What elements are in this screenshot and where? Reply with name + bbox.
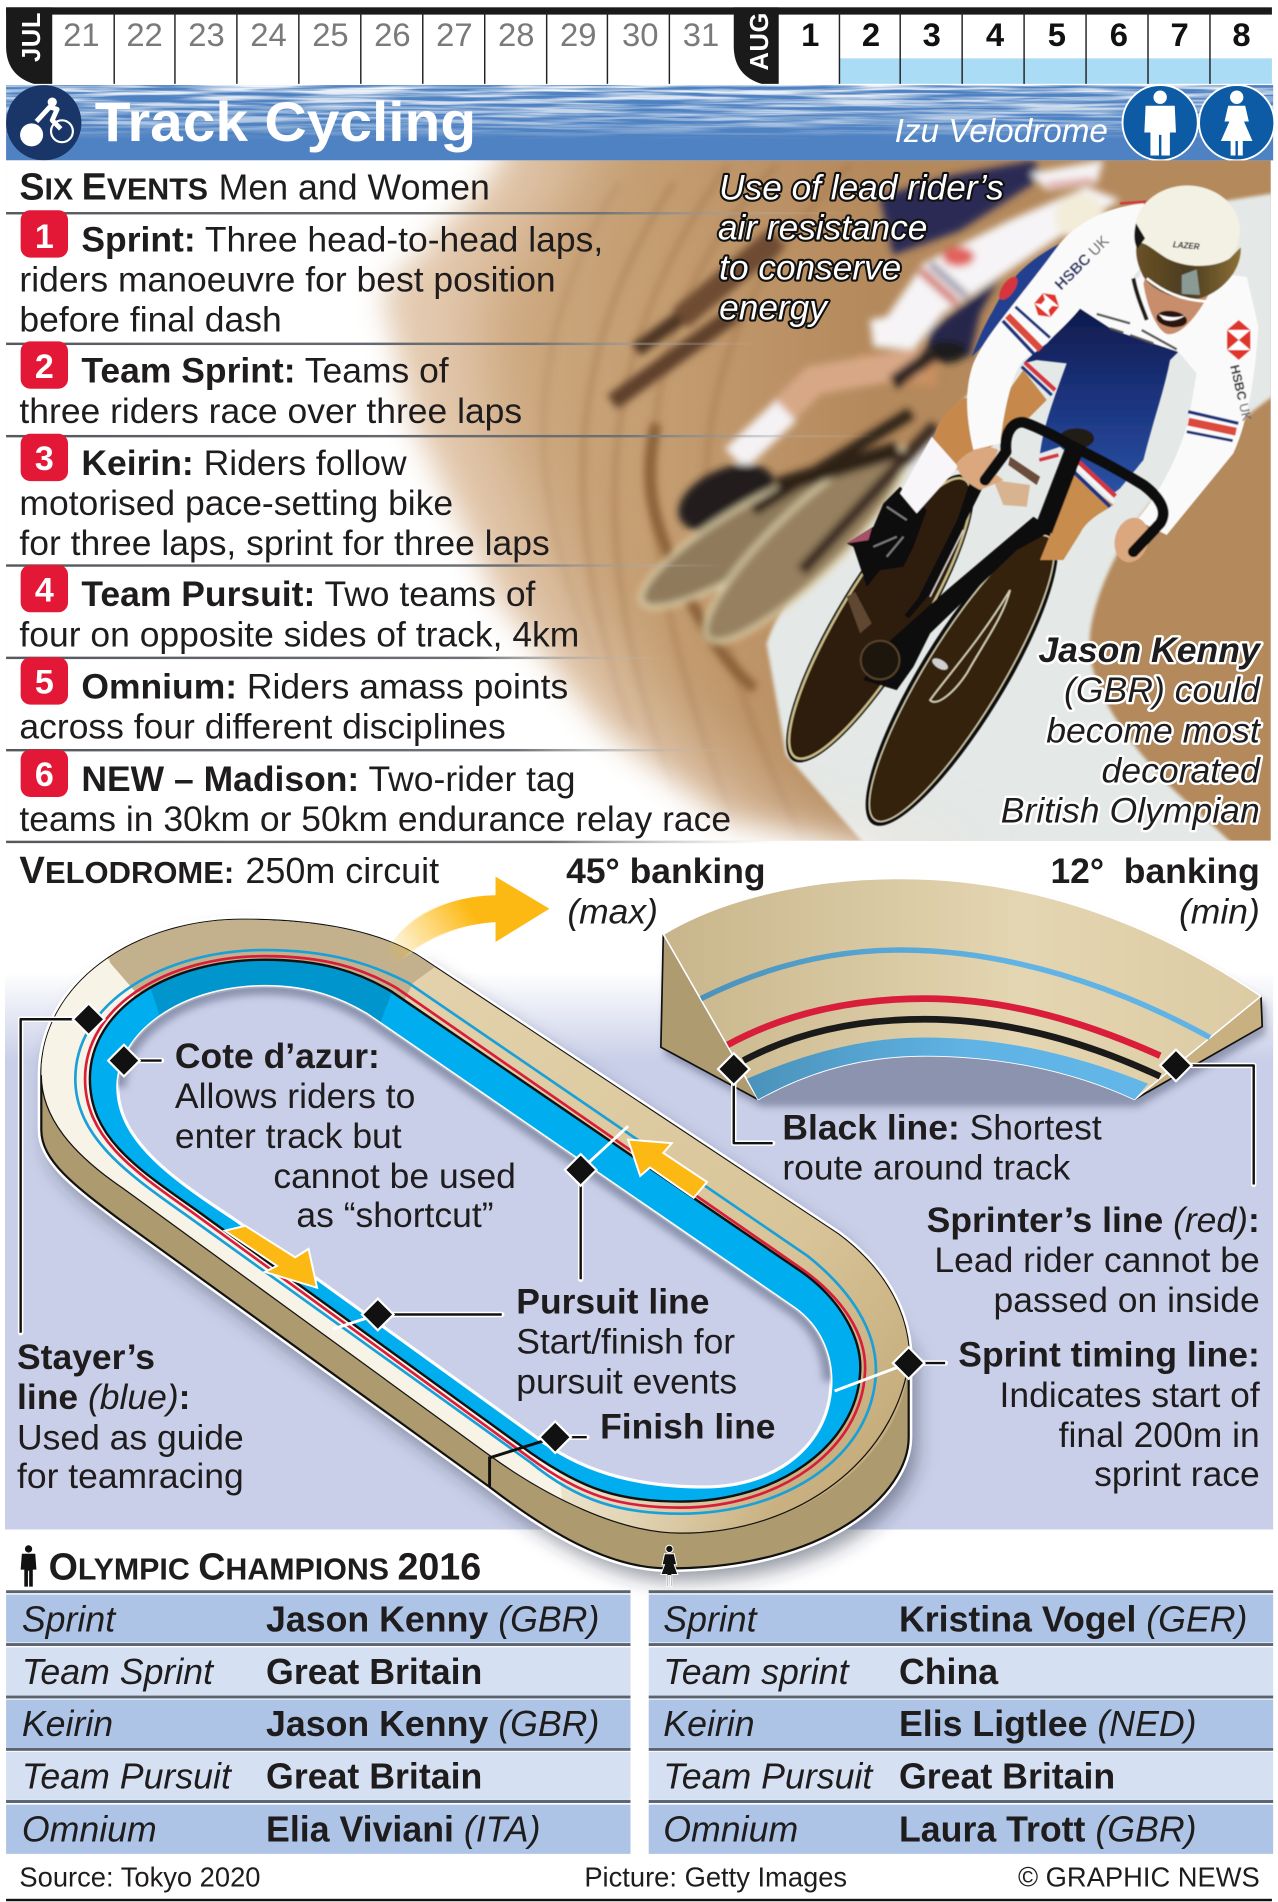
table: men's champions: Jason Kenny (GBR) (266, 1600, 599, 1640)
August dates: 8 (1232, 16, 1251, 53)
heading: velodrome: 250m circuit (245, 850, 439, 891)
label: sprint timing line: final 200m in (1059, 1415, 1260, 1455)
heading: velodrome: VELODROME: (19, 849, 234, 892)
label: stayer's line: Used as guide (17, 1417, 244, 1457)
table: men's champions: Keirin (22, 1704, 113, 1744)
helmet logo: LAZER (1173, 240, 1200, 252)
label: cote d'azur: as “shortcut” (296, 1195, 494, 1235)
table: women's champions: Great Britain (899, 1756, 1115, 1796)
left thigh (932, 370, 1047, 470)
event 1: Sprint: before final dash (19, 300, 282, 340)
label: 12 degree banking (1050, 851, 1260, 931)
chain stay detail (1008, 457, 1040, 485)
label: black line: Black line: Shortest (782, 1108, 1102, 1148)
event 3: Keirin: Keirin: Riders follow (81, 443, 407, 483)
label: cote d'azur: Cote d’azur: (175, 1036, 380, 1076)
rules between events (6, 212, 881, 843)
sprinter's line (red) (85, 956, 865, 1508)
July dates: 22 (126, 16, 163, 53)
table: women's champions: Elis Ligtlee (NED) (899, 1704, 1197, 1744)
callout: Jason Kenny: decorated (1102, 750, 1261, 790)
arrow: direction of travel, lower (225, 1226, 317, 1288)
July dates: 31 (683, 16, 719, 53)
left wall (661, 934, 758, 1099)
event 4: Team Pursuit: 4 (35, 571, 54, 609)
August dates: 6 (1110, 16, 1128, 53)
label: cote d'azur: Allows riders to (175, 1076, 415, 1116)
jersey and left arm (967, 203, 1147, 450)
July dates: 23 (188, 16, 225, 53)
label: 45 degree banking (566, 851, 766, 931)
label: sprinter's line: passed on inside (994, 1280, 1260, 1320)
forearm stripes (1187, 412, 1238, 441)
July dates: 25 (312, 16, 349, 53)
July dates: 29 (560, 16, 597, 53)
label: stayer's line: Stayer’s (17, 1337, 155, 1377)
callout: Jason Kenny: British Olympian (1001, 790, 1260, 830)
August dates: 7 (1170, 16, 1189, 53)
infield (118, 986, 831, 1487)
label: sprinter's line: Lead rider cannot be (934, 1240, 1260, 1280)
panel: rider photo illustration (6, 160, 1271, 841)
upper body (900, 185, 1258, 566)
icon: men (1123, 85, 1198, 160)
event 6: Madison: teams in 30km or 50km endurance relay race (19, 799, 731, 839)
table: men's champions: Team Pursuit (22, 1756, 233, 1796)
footer credits: Picture: Getty Images (584, 1862, 847, 1893)
sprinter's line (728, 999, 1160, 1056)
light track band (767, 192, 1278, 850)
label: cote d'azur: cannot be used (273, 1156, 516, 1196)
label: sprinter's line (927, 1200, 1260, 1320)
heading: six events: Men and Women (219, 167, 490, 207)
outer surface edge (41, 1075, 909, 1533)
icon: woman silhouette (661, 1545, 678, 1587)
label: 45 degree banking: (max) (567, 891, 658, 931)
event 6: Madison (19, 750, 731, 839)
mouth (1155, 309, 1188, 329)
right arm and shoulder (1080, 203, 1258, 535)
icon: women (1199, 85, 1274, 160)
label: black line: route around track (782, 1148, 1070, 1188)
table: women's champions: Team Pursuit (663, 1756, 874, 1796)
leader lines (21, 1019, 1254, 1437)
track surface (663, 878, 1261, 1099)
upper body: HSBC UK (1227, 364, 1254, 423)
month tab: July: JUL (18, 12, 46, 62)
footer credits: Source: Tokyo 2020 (19, 1862, 260, 1893)
right lower leg (1040, 473, 1113, 560)
event 4: Team Pursuit (19, 565, 579, 654)
label: pursuit line (516, 1281, 737, 1401)
darker band at top bend (134, 935, 413, 1027)
event 3: Keirin (19, 434, 550, 563)
helmet (1135, 185, 1240, 276)
label: stayer's line: line (blue): (17, 1377, 190, 1417)
pursuit, timing lines (333, 1126, 909, 1391)
callout: Jason Kenny: (GBR) could (1064, 670, 1261, 710)
label: cote d'azur (175, 1036, 516, 1235)
label: cote d'azur: enter track but (175, 1116, 402, 1156)
callout: Jason Kenny: become most (1046, 710, 1262, 750)
callout: lead rider air resistance: air resistance (718, 208, 927, 247)
table: men's champions (6, 1590, 630, 1854)
label: 12 degree banking: 12° banking (1050, 851, 1260, 891)
table: women's champions: Keirin (663, 1704, 755, 1744)
event 5: Omnium: Omnium: Riders amass points (81, 667, 568, 707)
July dates (63, 16, 719, 53)
white fade on the left (6, 160, 864, 841)
August dates: 3 (923, 16, 941, 53)
table: women's champions: Sprint (663, 1600, 759, 1640)
title text: Track Cycling (95, 90, 476, 153)
table: men's champions: Great Britain (266, 1652, 482, 1692)
July dates: 28 (498, 16, 535, 53)
outer wall (41, 920, 909, 1568)
table: women's champions (649, 1590, 1273, 1854)
event 6: Madison: NEW – Madison: Two-rider tag (81, 759, 575, 799)
front wheel (864, 532, 1058, 827)
label: pursuit line: pursuit events (516, 1361, 737, 1401)
event 1: Sprint (19, 210, 603, 340)
shorts (1023, 308, 1178, 493)
label: finish line: Finish line (600, 1406, 776, 1446)
arrow: direction of travel, upper (628, 1140, 707, 1198)
highlighted competition days (839, 58, 1272, 84)
shoulder stripes (1003, 307, 1050, 354)
upper body: HSBC UK (1052, 232, 1113, 294)
back rider leg (784, 362, 920, 411)
shadow (49, 932, 916, 1581)
callout: Jason Kenny (1001, 630, 1262, 830)
shadow (665, 886, 1266, 1107)
HSBC logo: shoulder (1030, 288, 1063, 322)
label: pursuit line: Pursuit line (516, 1281, 709, 1321)
event 2: Team Sprint: Team Sprint: Teams of (81, 351, 449, 391)
shoe (847, 487, 927, 587)
back rider wheels (636, 479, 819, 613)
month tab: July (6, 7, 52, 84)
arrow: banking detail pointer (388, 875, 552, 966)
black line (743, 1019, 1160, 1076)
August dates: 5 (1048, 16, 1066, 53)
pale outer fade (6, 160, 862, 840)
stayer's line (701, 950, 1210, 1037)
table: women's champions: Team sprint (663, 1652, 851, 1692)
face (1143, 273, 1208, 334)
month tab: August (734, 7, 779, 84)
August dates (801, 16, 1251, 53)
background riders (612, 160, 1120, 663)
curved shadow below riders (650, 424, 754, 689)
event 2: Team Sprint (19, 341, 522, 431)
July dates: 30 (622, 16, 658, 53)
table: men's champions: Omnium (22, 1810, 157, 1850)
label: 45 degree banking: 45° banking (566, 851, 766, 891)
lead rider: Jason Kenny (758, 185, 1258, 846)
callout: Jason Kenny: Jason Kenny (1038, 630, 1262, 670)
July dates: 24 (250, 16, 287, 53)
title banner (6, 85, 1274, 160)
HSBC logo: arm (1227, 320, 1250, 360)
black line (90, 960, 860, 1502)
July dates: 27 (436, 16, 473, 53)
icon: cyclist pictogram (6, 85, 81, 160)
table: men's champions: Elia Viviani (ITA) (266, 1810, 541, 1850)
hands (957, 447, 1003, 490)
velodrome track (0, 899, 948, 1581)
heading: six events: SIX EVENTS (19, 165, 208, 207)
event 3: Keirin: motorised pace-setting bike (19, 483, 453, 523)
label: black line (782, 1108, 1102, 1188)
callout: lead rider air resistance (718, 168, 1004, 328)
blue cote d'azur band (90, 960, 860, 1502)
table: men's champions: Team Sprint (22, 1652, 215, 1692)
event 3: Keirin: 3 (35, 440, 54, 478)
handlebar (985, 422, 1163, 552)
dark top bend (97, 899, 462, 1033)
lower bike (785, 474, 1058, 827)
visor (1136, 243, 1241, 299)
label: sprint timing line: Indicates start of (1000, 1375, 1260, 1415)
event 3: Keirin: for three laps, sprint for three laps (19, 523, 550, 563)
table: women's champions: Laura Trott (GBR) (899, 1810, 1197, 1850)
white sock (900, 437, 958, 513)
footer credits: © GRAPHIC NEWS (1018, 1862, 1260, 1893)
banking cross-section (661, 878, 1266, 1107)
label: 12 degree banking: (min) (1179, 891, 1260, 931)
August dates: 4 (986, 16, 1005, 53)
venue: Izu Velodrome (895, 113, 1108, 150)
table: men's champions: Jason Kenny (GBR) (266, 1704, 599, 1744)
callout: lead rider air resistance: to conserve (719, 248, 901, 287)
finish line (490, 1437, 555, 1487)
event 5: Omnium: across four different disciplines (19, 707, 506, 747)
frame (863, 517, 1053, 690)
label: stayer's line (17, 1337, 244, 1496)
stayer's line (blue) (75, 950, 876, 1514)
event 1: Sprint: riders manoeuvre for best position (19, 260, 556, 300)
label: stayer's line: for teamracing (17, 1456, 244, 1496)
footer credits (6, 1862, 1272, 1901)
sponsor marks (1097, 314, 1177, 349)
label: sprint timing line: sprint race (1094, 1454, 1260, 1494)
event 1: Sprint: Sprint: Three head-to-head laps, (81, 220, 603, 260)
August dates: 2 (862, 16, 880, 53)
rear wheel (785, 474, 974, 764)
label: sprint timing line: Sprint timing line: (958, 1335, 1260, 1375)
July dates: 21 (63, 16, 100, 53)
second rider jersey (857, 160, 1120, 373)
callout: lead rider air resistance: energy (719, 289, 829, 328)
table: women's champions: China (899, 1652, 999, 1692)
cote d'azur band (747, 1037, 1148, 1099)
callout: lead rider air resistance: Use of lead rider’s (719, 168, 1004, 207)
event 1: Sprint: 1 (35, 218, 54, 256)
table: men's champions: Great Britain (266, 1756, 482, 1796)
calendar strip (6, 7, 1272, 84)
label: sprinter's line: Sprinter’s line (red): (927, 1200, 1260, 1240)
right wall (1135, 996, 1262, 1099)
event 2: Team Sprint: 2 (35, 348, 54, 386)
August dates: 1 (801, 16, 819, 53)
table: women's champions: Kristina Vogel (GER) (899, 1600, 1247, 1640)
table: men's champions: Sprint (22, 1600, 117, 1640)
label: sprint timing line (958, 1335, 1260, 1494)
event 4: Team Pursuit: Team Pursuit: Two teams of (81, 574, 536, 614)
month tab: August: AUG (746, 12, 774, 70)
crank (847, 592, 872, 633)
icon: man silhouette (21, 1545, 36, 1587)
table: women's champions: Omnium (663, 1810, 798, 1850)
second rider navy kit (880, 160, 1045, 255)
panel: velodrome background (5, 972, 1273, 1530)
event 2: Team Sprint: three riders race over three laps (19, 391, 522, 431)
heading: Olympic champions: OLYMPIC CHAMPIONS 2016 (49, 1545, 481, 1587)
track streaks (545, 167, 818, 765)
event 5: Omnium (19, 657, 568, 747)
label: pursuit line: Start/finish for (516, 1321, 735, 1361)
event 6: Madison: 6 (35, 756, 54, 794)
event 5: Omnium: 5 (35, 664, 54, 702)
event 4: Team Pursuit: four on opposite sides of track, 4km (19, 614, 579, 654)
stem and head tube (1043, 443, 1077, 530)
July dates: 26 (374, 16, 411, 53)
back rider shoe (672, 460, 780, 535)
track surface (0, 899, 948, 1579)
blue side panel (972, 243, 1060, 357)
wheel graphic (930, 590, 1010, 702)
cream left side and lower straight (0, 899, 571, 1579)
marker diamonds (73, 1003, 1192, 1453)
leg stripes (1022, 363, 1115, 507)
